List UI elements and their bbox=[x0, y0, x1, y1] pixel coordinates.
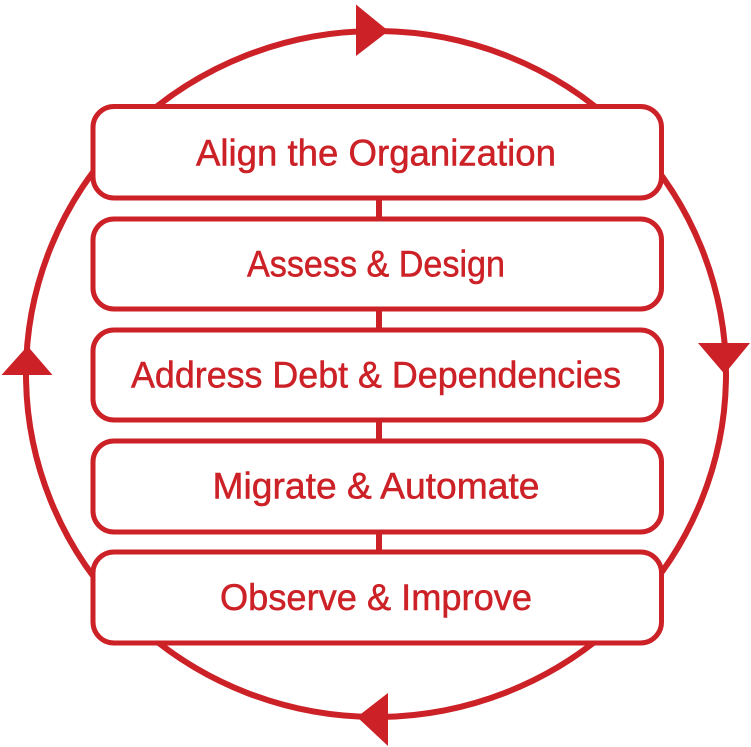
arrow: top bbox=[356, 4, 388, 56]
step: Align the Organization bbox=[93, 106, 662, 198]
step: Assess & Design: Assess & Design bbox=[247, 244, 505, 284]
connector lines between steps bbox=[376, 195, 382, 555]
arrow: left bbox=[2, 346, 52, 375]
step: Align the Organization: Align the Organization bbox=[196, 132, 556, 174]
step: Observe & Improve bbox=[93, 552, 662, 643]
step: Migrate & Automate: Migrate & Automate bbox=[212, 466, 540, 506]
step: Migrate & Automate bbox=[93, 441, 662, 532]
step: Assess & Design bbox=[93, 219, 662, 309]
arrow: right bbox=[698, 343, 750, 374]
step: Observe & Improve: Observe & Improve bbox=[220, 577, 532, 618]
step: Address Debt & Dependencies bbox=[93, 330, 662, 420]
arrow: bottom bbox=[357, 693, 388, 746]
step: Address Debt & Dependencies: Address Debt & Dependencies bbox=[131, 354, 621, 396]
